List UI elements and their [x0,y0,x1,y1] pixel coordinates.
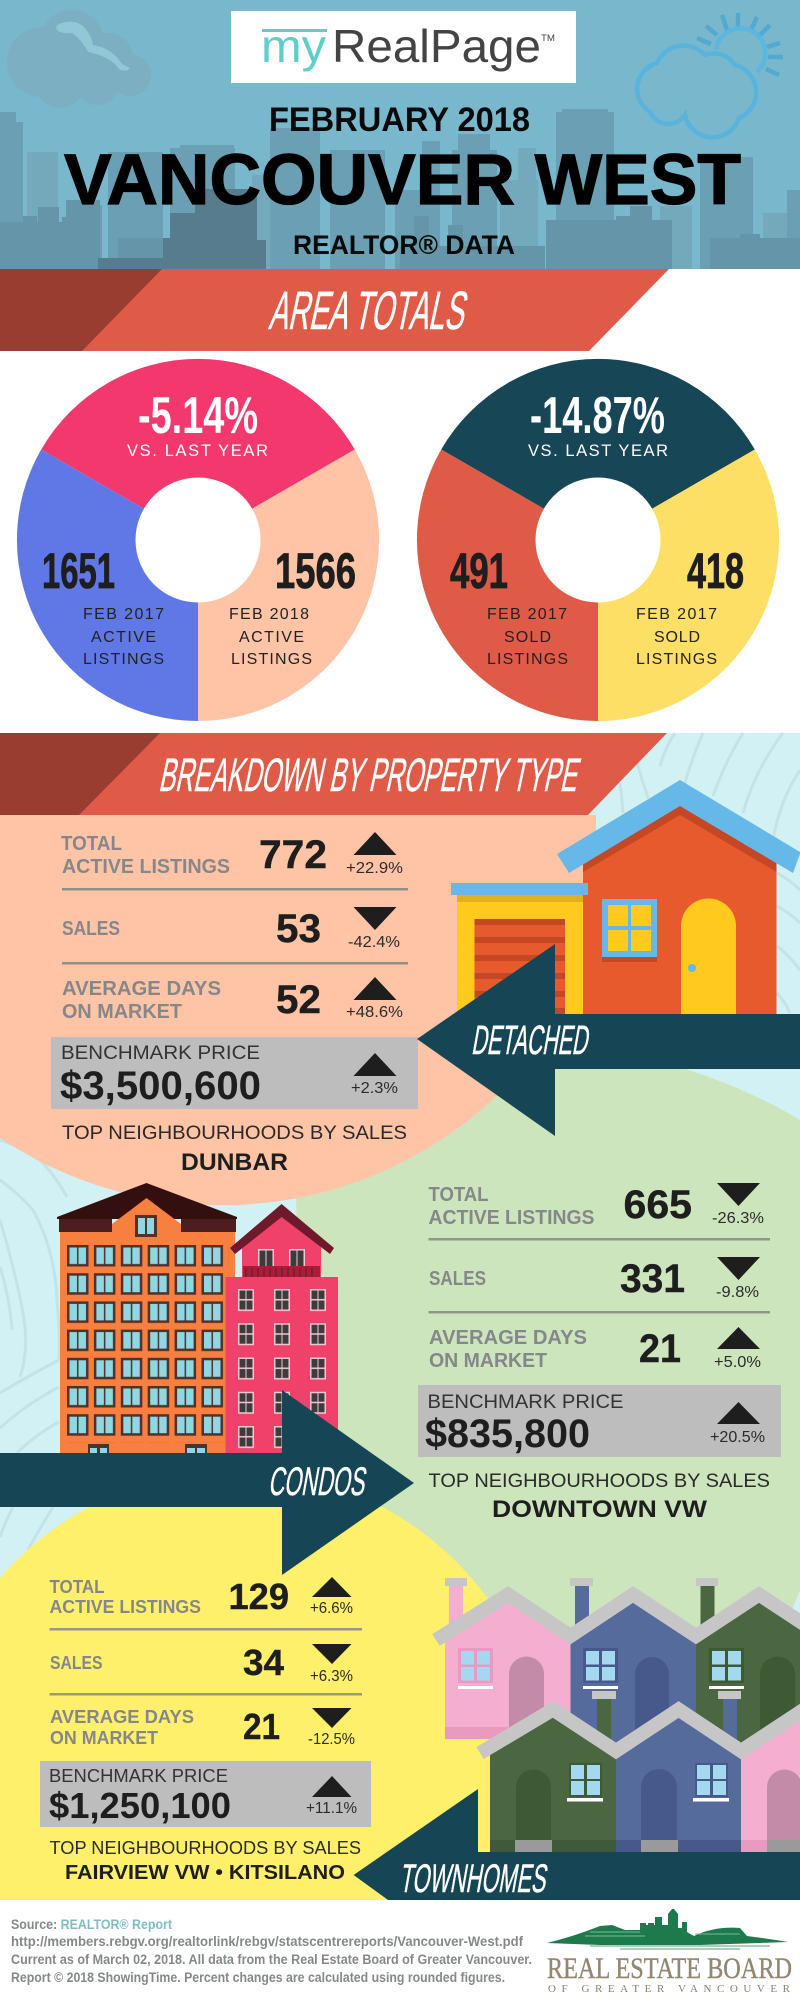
sales: -9.8% [716,1284,759,1301]
average days on market [429,1327,761,1372]
icon: sun and cloud outline [637,13,783,137]
source text: Current as of March 02, 2018. All data from the Real Estate Board of Greater Vancouver. [11,1952,532,1967]
Feb 2018 active [229,543,356,668]
top neighbourhoods: DUNBAR [181,1149,288,1176]
sales: -42.4% [348,934,400,951]
Feb 2017 active: 1651 [42,543,115,599]
Feb 2017 sold right: LISTINGS [636,651,718,668]
arrow: detached [417,944,800,1136]
Feb 2017 active: LISTINGS [83,651,165,668]
benchmark price: +11.1% [306,1800,357,1817]
source text: Source: REALTOR® Report [11,1917,172,1932]
logo: RealPage [332,20,541,72]
sales [50,1642,353,1685]
total active listings: 129 [228,1576,289,1617]
average days on market: ON MARKET [62,1001,182,1023]
benchmark price: BENCHMARK PRICE [49,1766,228,1786]
total active listings: 665 [624,1183,692,1227]
illustration: detached house [451,780,800,1014]
average days on market [50,1706,355,1748]
total active listings: ACTIVE LISTINGS [428,1207,594,1229]
top neighbourhoods: TOP NEIGHBOURHOODS BY SALES [50,1838,361,1858]
sales: 53 [276,907,321,951]
top neighbourhoods: TOP NEIGHBOURHOODS BY SALES [428,1471,770,1492]
sales [429,1257,760,1301]
benchmark price [418,1385,781,1457]
average days on market: +48.6% [346,1004,403,1021]
skyline [0,109,800,269]
arrow: townhomes: TOWNHOMES [397,1856,551,1901]
average days on market: 21 [639,1327,681,1371]
property type section background [0,733,800,1900]
banner: area totals [0,269,669,351]
logo: Real Estate Board of Greater Vancouver [547,1909,792,1995]
arrow: condos: CONDOS [266,1459,370,1504]
stats: detached [51,832,418,1176]
average days on market [62,977,403,1023]
sales: 331 [620,1257,685,1301]
yellow townhomes backdrop [0,1470,547,1900]
average days on market: ON MARKET [50,1728,158,1748]
source text: Report © 2018 ShowingTime. Percent changes are calculated using rounded figures. [11,1970,505,1985]
sales [62,907,400,951]
average days on market: 21 [243,1706,280,1747]
total active listings: ACTIVE LISTINGS [50,1597,201,1617]
average days on market: ON MARKET [429,1350,547,1372]
stats: townhomes [40,1576,371,1884]
benchmark price: $835,800 [425,1412,590,1456]
total active listings: 772 [259,833,327,877]
title: VANCOUVER WEST [64,141,741,220]
logo: my [261,20,326,72]
total active listings: TOTAL [61,833,122,855]
illustration: townhomes [436,1578,800,1852]
top neighbourhoods: TOP NEIGHBOURHOODS BY SALES [62,1123,407,1144]
Feb 2018 active: ACTIVE [239,629,305,646]
Feb 2018 active: FEB 2018 [229,606,310,623]
average days on market: 52 [276,978,321,1022]
Feb 2017 active [42,543,165,668]
banner: area totals: AREA TOTALS [265,281,473,341]
Feb 2017 sold left: LISTINGS [487,651,569,668]
footer panel [0,1900,800,2000]
top neighbourhoods [62,1123,407,1176]
total active listings [61,832,403,878]
active percent change [127,387,268,460]
stats: condos [418,1183,781,1523]
total active listings: TOTAL [428,1184,488,1206]
top neighbourhoods [50,1838,361,1884]
total active listings: +6.6% [310,1600,353,1617]
total active listings [50,1576,353,1617]
heading: date: FEBRUARY 2018 [269,101,530,139]
Feb 2017 sold right: SOLD [654,629,701,646]
benchmark price: $1,250,100 [49,1785,231,1826]
arrow: townhomes [354,1789,800,1901]
sold percent change [528,387,668,460]
average days on market: AVERAGE DAYS [429,1327,587,1349]
sales: +6.3% [310,1668,353,1685]
logo: TM [541,33,555,43]
donut chart: sold listings [417,359,779,721]
green condos backdrop [296,1054,800,1640]
benchmark price: BENCHMARK PRICE [428,1392,624,1413]
sales: SALES [429,1268,486,1290]
Feb 2017 sold left: 491 [450,543,508,599]
source text [11,1917,532,1985]
top neighbourhoods [428,1471,770,1523]
Feb 2018 active: 1566 [275,543,356,599]
header panel [0,0,800,269]
subtitle: REALTOR® DATA [293,230,515,260]
average days on market: AVERAGE DAYS [50,1707,194,1727]
benchmark price [51,1037,418,1109]
arrow: condos [0,1390,414,1575]
top neighbourhoods: DOWNTOWN VW [492,1496,707,1523]
benchmark price [40,1761,371,1827]
sales: SALES [50,1653,102,1673]
benchmark price: +20.5% [710,1429,765,1446]
average days on market: -12.5% [308,1731,355,1748]
benchmark price: $3,500,600 [60,1064,261,1108]
average days on market: +5.0% [714,1354,761,1371]
sold percent change: VS. LAST YEAR [528,442,668,460]
benchmark price: BENCHMARK PRICE [61,1043,260,1064]
total active listings: TOTAL [50,1577,105,1597]
sales: SALES [62,918,120,940]
total active listings: ACTIVE LISTINGS [62,856,230,878]
Feb 2017 sold left [450,543,569,668]
Feb 2017 sold right: 418 [687,543,744,599]
illustration: condo buildings [57,1183,338,1453]
banner: breakdown by property type [0,733,667,815]
top neighbourhoods: FAIRVIEW VW • KITSILANO [65,1862,345,1884]
active percent change: VS. LAST YEAR [127,442,268,460]
Feb 2017 sold left: SOLD [504,629,552,646]
logo: Real Estate Board of Greater Vancouver: OF GREATER VANCOUVER [548,1983,791,1995]
Feb 2017 sold left: FEB 2017 [487,606,568,623]
peach detached backdrop [0,815,596,1205]
total active listings: -26.3% [712,1210,764,1227]
sold percent change: -14.87% [530,387,665,445]
donut chart: active listings [17,359,379,721]
total active listings [428,1183,764,1229]
Feb 2018 active: LISTINGS [231,651,313,668]
icon: grey cloud [7,10,151,108]
sales: 34 [243,1642,284,1683]
arrow: detached: DETACHED [469,1017,593,1063]
active percent change: -5.14% [138,387,258,445]
average days on market: AVERAGE DAYS [62,978,221,1000]
logo [231,11,576,83]
Feb 2017 sold right [636,543,744,668]
Feb 2017 sold right: FEB 2017 [636,606,718,623]
Feb 2017 active: ACTIVE [91,629,157,646]
benchmark price: +2.3% [351,1080,398,1097]
Feb 2017 active: FEB 2017 [83,606,165,623]
total active listings: +22.9% [346,860,403,877]
source text: http://members.rebgv.org/realtorlink/rebgv/statscentrereports/Vancouver-West.pdf [11,1934,523,1949]
